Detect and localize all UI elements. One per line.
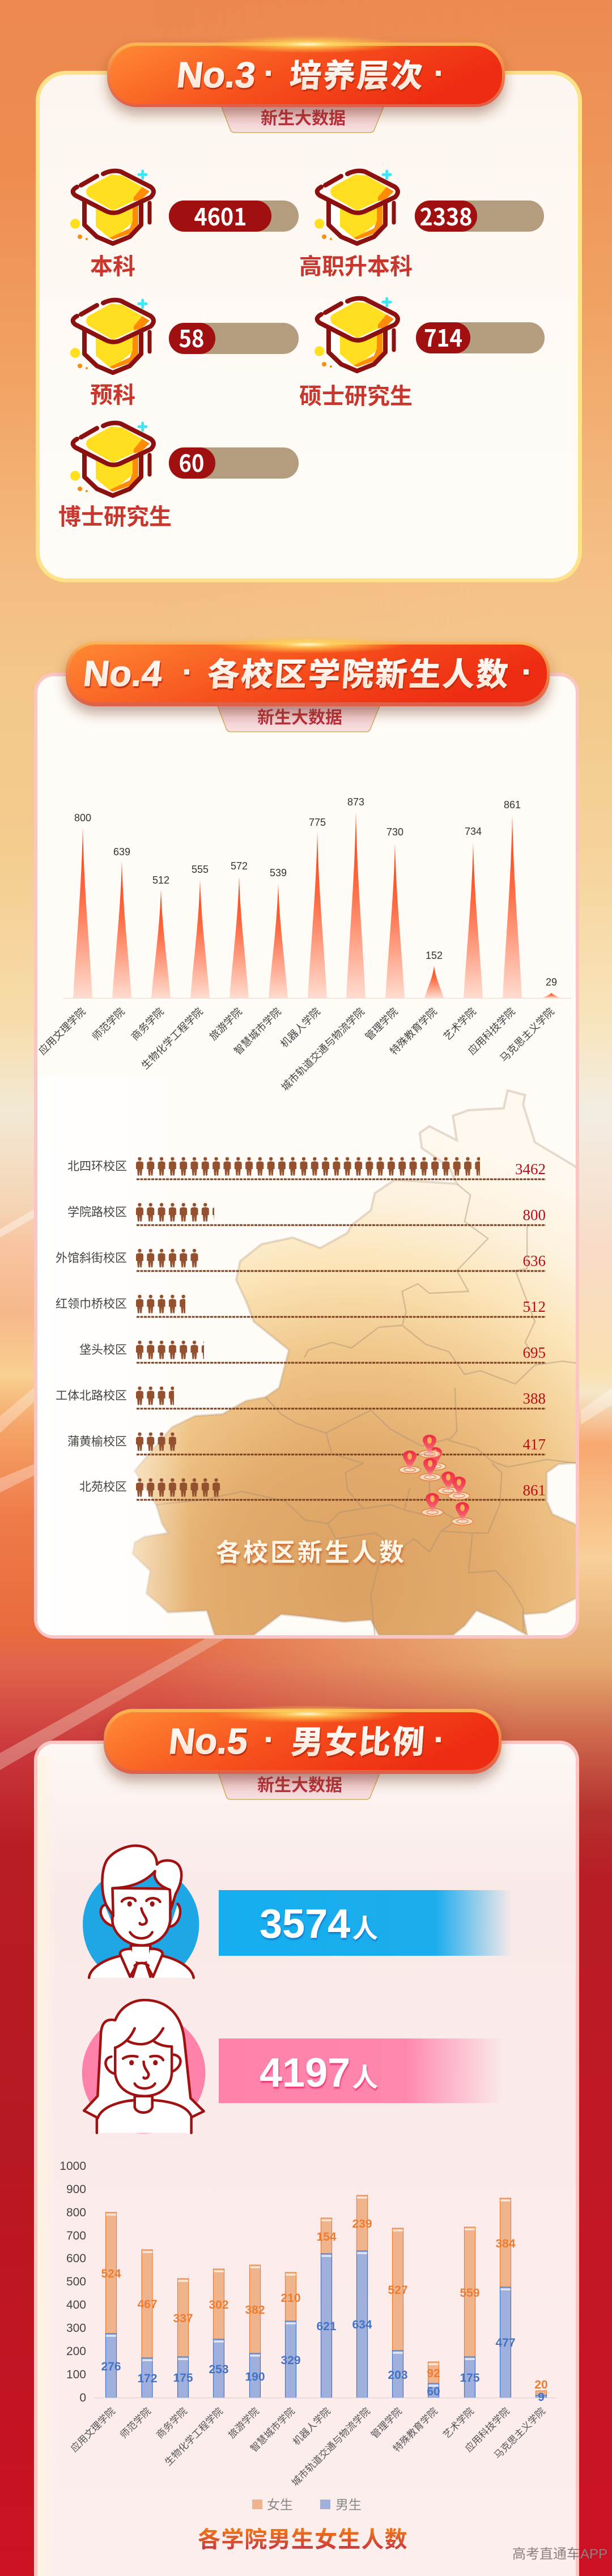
boy values: 621: [316, 2320, 337, 2333]
row: 蒲黄榆校区: [67, 1432, 546, 1453]
count bar: 2338: [419, 198, 473, 233]
left cream edge: [37, 1756, 58, 2576]
heading text: [167, 1721, 444, 1762]
heading text: ·: [182, 654, 193, 689]
count bar: [169, 320, 299, 355]
heading pill: [66, 636, 550, 706]
row: 工体北路校区: 388: [522, 1390, 546, 1407]
heading pill: [107, 35, 505, 107]
panel: gender ratio: [36, 1705, 577, 2576]
sub tab: [216, 703, 381, 732]
heading text: ·: [522, 654, 532, 689]
row: 外馆斜街校区: [56, 1249, 546, 1269]
male count bar: 3574人: [260, 1901, 378, 1947]
row: 外馆斜街校区: 636: [522, 1252, 546, 1269]
icon: graduation cap: [70, 171, 154, 244]
x axis college labels: 智慧城市学院: [248, 2406, 297, 2454]
row: 工体北路校区: [56, 1387, 546, 1407]
y axis labels: 400: [66, 2298, 86, 2311]
girl values: 154: [316, 2230, 337, 2244]
y axis labels: 900: [66, 2183, 86, 2196]
row: 北四环校区: [67, 1157, 546, 1178]
row: 垡头校区: 垡头校区: [79, 1344, 127, 1357]
row: 北苑校区: 北苑校区: [79, 1481, 127, 1494]
heading text: ·: [264, 1721, 274, 1757]
icon: graduation cap: [314, 171, 398, 244]
row: 北苑校区: [79, 1478, 546, 1499]
girl bars: [105, 2195, 546, 2395]
level item: junior college to bachelor: [299, 171, 544, 279]
heading text: [82, 653, 532, 694]
panel card: [36, 675, 577, 1637]
spike values: 512: [152, 875, 169, 886]
female count bar: [219, 2038, 504, 2103]
spike values: 775: [309, 817, 326, 828]
x axis college labels: 管理学院: [369, 2406, 404, 2441]
boy values: 9: [538, 2391, 545, 2404]
spike college labels: 应用文理学院: [36, 1006, 88, 1057]
row: 垡头校区: [79, 1341, 546, 1361]
girl values: 92: [427, 2367, 440, 2380]
row: 北四环校区: 3462: [515, 1161, 546, 1178]
sub tab: [218, 1771, 381, 1799]
count bar: [169, 445, 299, 479]
spike values: 734: [465, 826, 482, 837]
count bar: 714: [424, 319, 462, 354]
y axis labels: 600: [66, 2252, 86, 2265]
label: 硕士研究生: [299, 384, 413, 409]
heading text: ·: [434, 55, 444, 91]
legend: 男生: [335, 2497, 362, 2512]
y axis labels: 100: [66, 2368, 86, 2381]
spike college labels: 师范学院: [90, 1006, 127, 1043]
spike college labels: 应用科技学院: [466, 1006, 517, 1057]
y axis labels: [60, 2160, 86, 2404]
girl values: 524: [101, 2267, 121, 2280]
heading text: 男女比例: [290, 1724, 427, 1760]
male count bar: [219, 1890, 512, 1956]
y axis labels: 0: [79, 2391, 86, 2404]
background right tone: [197, 111, 612, 1854]
level item: master: [299, 298, 545, 409]
watermark: 高考直通车APP: [512, 2547, 607, 2562]
heading text: No.4: [82, 653, 164, 694]
spike college labels: [36, 1006, 556, 1093]
heading text: No.3: [175, 54, 258, 95]
bar highlights: [106, 2198, 511, 2386]
heading text: [175, 54, 444, 95]
spike college labels: 商务学院: [129, 1006, 166, 1043]
y axis labels: 200: [66, 2345, 86, 2358]
spike chart: freshmen per college: [36, 796, 571, 1093]
male avatar: [83, 1846, 199, 1978]
girl values: 382: [245, 2304, 265, 2317]
count bar: [416, 319, 545, 354]
sub tab: 新生大数据: [261, 109, 346, 128]
heading text: 培养层次: [288, 58, 426, 93]
row: 蒲黄榆校区: 蒲黄榆校区: [67, 1435, 127, 1448]
x axis college labels: 商务学院: [154, 2406, 189, 2441]
icon: graduation cap: [314, 298, 398, 371]
label: 博士研究生: [58, 505, 172, 530]
pictogram list: freshmen per campus: [56, 1157, 546, 1500]
dashed row rules: [137, 1179, 546, 1500]
spike values: 800: [74, 812, 91, 824]
heading text: ·: [434, 1721, 444, 1757]
heading pill: [104, 1705, 502, 1774]
spike college labels: 机器人学院: [278, 1006, 322, 1050]
row: 垡头校区: 695: [522, 1344, 546, 1361]
panel card: [36, 1742, 577, 2576]
x axis college labels: 机器人学院: [291, 2406, 333, 2447]
spike college labels: 城市轨道交通与物流学院: [279, 1006, 367, 1093]
boy bars: [105, 2251, 546, 2398]
female count bar: 4197人: [260, 2050, 378, 2096]
girl values: 20: [534, 2378, 548, 2391]
boy values: 329: [280, 2354, 301, 2367]
level item: preparatory: [70, 300, 299, 408]
girl values: 467: [137, 2298, 158, 2311]
x axis college labels: 生物化学工程学院: [163, 2406, 225, 2468]
boy values: 253: [209, 2363, 229, 2376]
legend: 女生: [267, 2497, 293, 2512]
boy values: 634: [352, 2318, 372, 2331]
girl values: 527: [388, 2284, 408, 2297]
x axis college labels: 特殊教育学院: [391, 2406, 440, 2454]
chart caption: 各学院男生女生人数: [198, 2527, 408, 2552]
spike values: [74, 796, 557, 988]
boy values: 172: [137, 2372, 158, 2385]
heading text: 各校区学院新生人数: [206, 656, 511, 692]
spike college labels: 旅游学院: [207, 1006, 244, 1043]
count bar: 58: [179, 320, 204, 355]
label: 预科: [90, 383, 135, 408]
stacked bar chart: boys and girls per college: [60, 2160, 557, 2512]
female avatar: [82, 2000, 205, 2134]
spike college labels: 智慧城市学院: [232, 1006, 283, 1057]
icon: graduation cap: [70, 300, 154, 373]
heading text: ·: [264, 55, 274, 91]
legend: [252, 2497, 362, 2512]
x axis college labels: 应用文理学院: [69, 2406, 117, 2454]
x axis college labels: 艺术学院: [441, 2406, 476, 2441]
panel: training levels: [37, 35, 580, 580]
x axis college labels: 旅游学院: [226, 2406, 261, 2441]
map caption: 各校区新生人数: [216, 1539, 406, 1567]
boy values: 276: [101, 2360, 121, 2373]
x axis college labels: 应用科技学院: [463, 2406, 512, 2454]
panel: campus and college freshmen: [36, 636, 582, 1637]
x axis college labels: 城市轨道交通与物流学院: [290, 2406, 372, 2488]
panel card: [37, 72, 580, 580]
spike college labels: 生物化学工程学院: [139, 1006, 205, 1072]
row: 学院路校区: 学院路校区: [67, 1206, 127, 1219]
spike values: 572: [231, 860, 248, 872]
girl values: 302: [209, 2298, 229, 2311]
sub tab: 新生大数据: [257, 1776, 342, 1795]
map pins: [399, 1435, 473, 1525]
level item: doctor: [58, 423, 299, 530]
boy values: 203: [388, 2369, 408, 2382]
spike college labels: 特殊教育学院: [388, 1006, 439, 1057]
background light streaks: [0, 1209, 612, 1770]
row: 红领巾桥校区: 512: [522, 1298, 546, 1315]
spike values: 555: [192, 864, 209, 875]
spike values: 873: [347, 796, 364, 808]
boy values: [101, 2318, 545, 2404]
spike values: 539: [270, 867, 287, 878]
row: 红领巾桥校区: 红领巾桥校区: [56, 1298, 127, 1311]
y axis labels: 500: [66, 2275, 86, 2288]
count bar: [169, 198, 299, 233]
row: 工体北路校区: 工体北路校区: [56, 1389, 127, 1402]
map background: [37, 1076, 582, 1637]
row: 北四环校区: 北四环校区: [67, 1160, 127, 1173]
spike values: 152: [426, 950, 443, 961]
girl values: 239: [352, 2217, 372, 2230]
y axis labels: 300: [66, 2322, 86, 2335]
boy values: 477: [495, 2336, 516, 2349]
girl values: 337: [173, 2312, 193, 2325]
y axis labels: 1000: [60, 2160, 86, 2173]
sub tab: [220, 104, 385, 133]
girl values: 559: [460, 2287, 480, 2300]
row: 北苑校区: 861: [522, 1482, 546, 1499]
row: 红领巾桥校区: [56, 1295, 546, 1315]
count bar: 4601: [194, 198, 247, 233]
girl values: 210: [280, 2292, 301, 2305]
spike values: 29: [546, 976, 557, 988]
icon: graduation cap: [70, 423, 154, 496]
boy values: 175: [460, 2372, 480, 2385]
label: 高职升本科: [299, 254, 413, 279]
level item: undergraduate: [70, 171, 299, 279]
boy values: 190: [245, 2370, 265, 2383]
spike values: 639: [113, 846, 130, 858]
spike values: 730: [386, 826, 403, 838]
heading text: No.5: [167, 1721, 250, 1762]
spike college labels: 管理学院: [363, 1006, 400, 1043]
row: 学院路校区: 800: [522, 1206, 546, 1223]
girl values: 384: [495, 2237, 516, 2250]
x axis college labels: 马克思主义学院: [492, 2406, 547, 2461]
count bar: [415, 198, 544, 233]
boy values: 175: [173, 2372, 193, 2385]
row: 学院路校区: [67, 1203, 546, 1223]
y axis labels: 700: [66, 2229, 86, 2242]
row: 蒲黄榆校区: 417: [522, 1436, 546, 1453]
y axis labels: 800: [66, 2206, 86, 2219]
label: 本科: [90, 254, 135, 279]
spike values: 861: [504, 799, 521, 811]
boy values: 60: [427, 2385, 440, 2398]
baseline: [94, 2397, 557, 2398]
sub tab: 新生大数据: [257, 709, 342, 727]
x axis college labels: 师范学院: [118, 2406, 153, 2441]
count bar: 60: [179, 445, 204, 479]
girl values: [101, 2217, 548, 2391]
spike college labels: 艺术学院: [441, 1006, 478, 1043]
row: 外馆斜街校区: 外馆斜街校区: [56, 1252, 127, 1265]
spike college labels: 马克思主义学院: [498, 1006, 556, 1064]
x axis college labels: [69, 2406, 547, 2488]
